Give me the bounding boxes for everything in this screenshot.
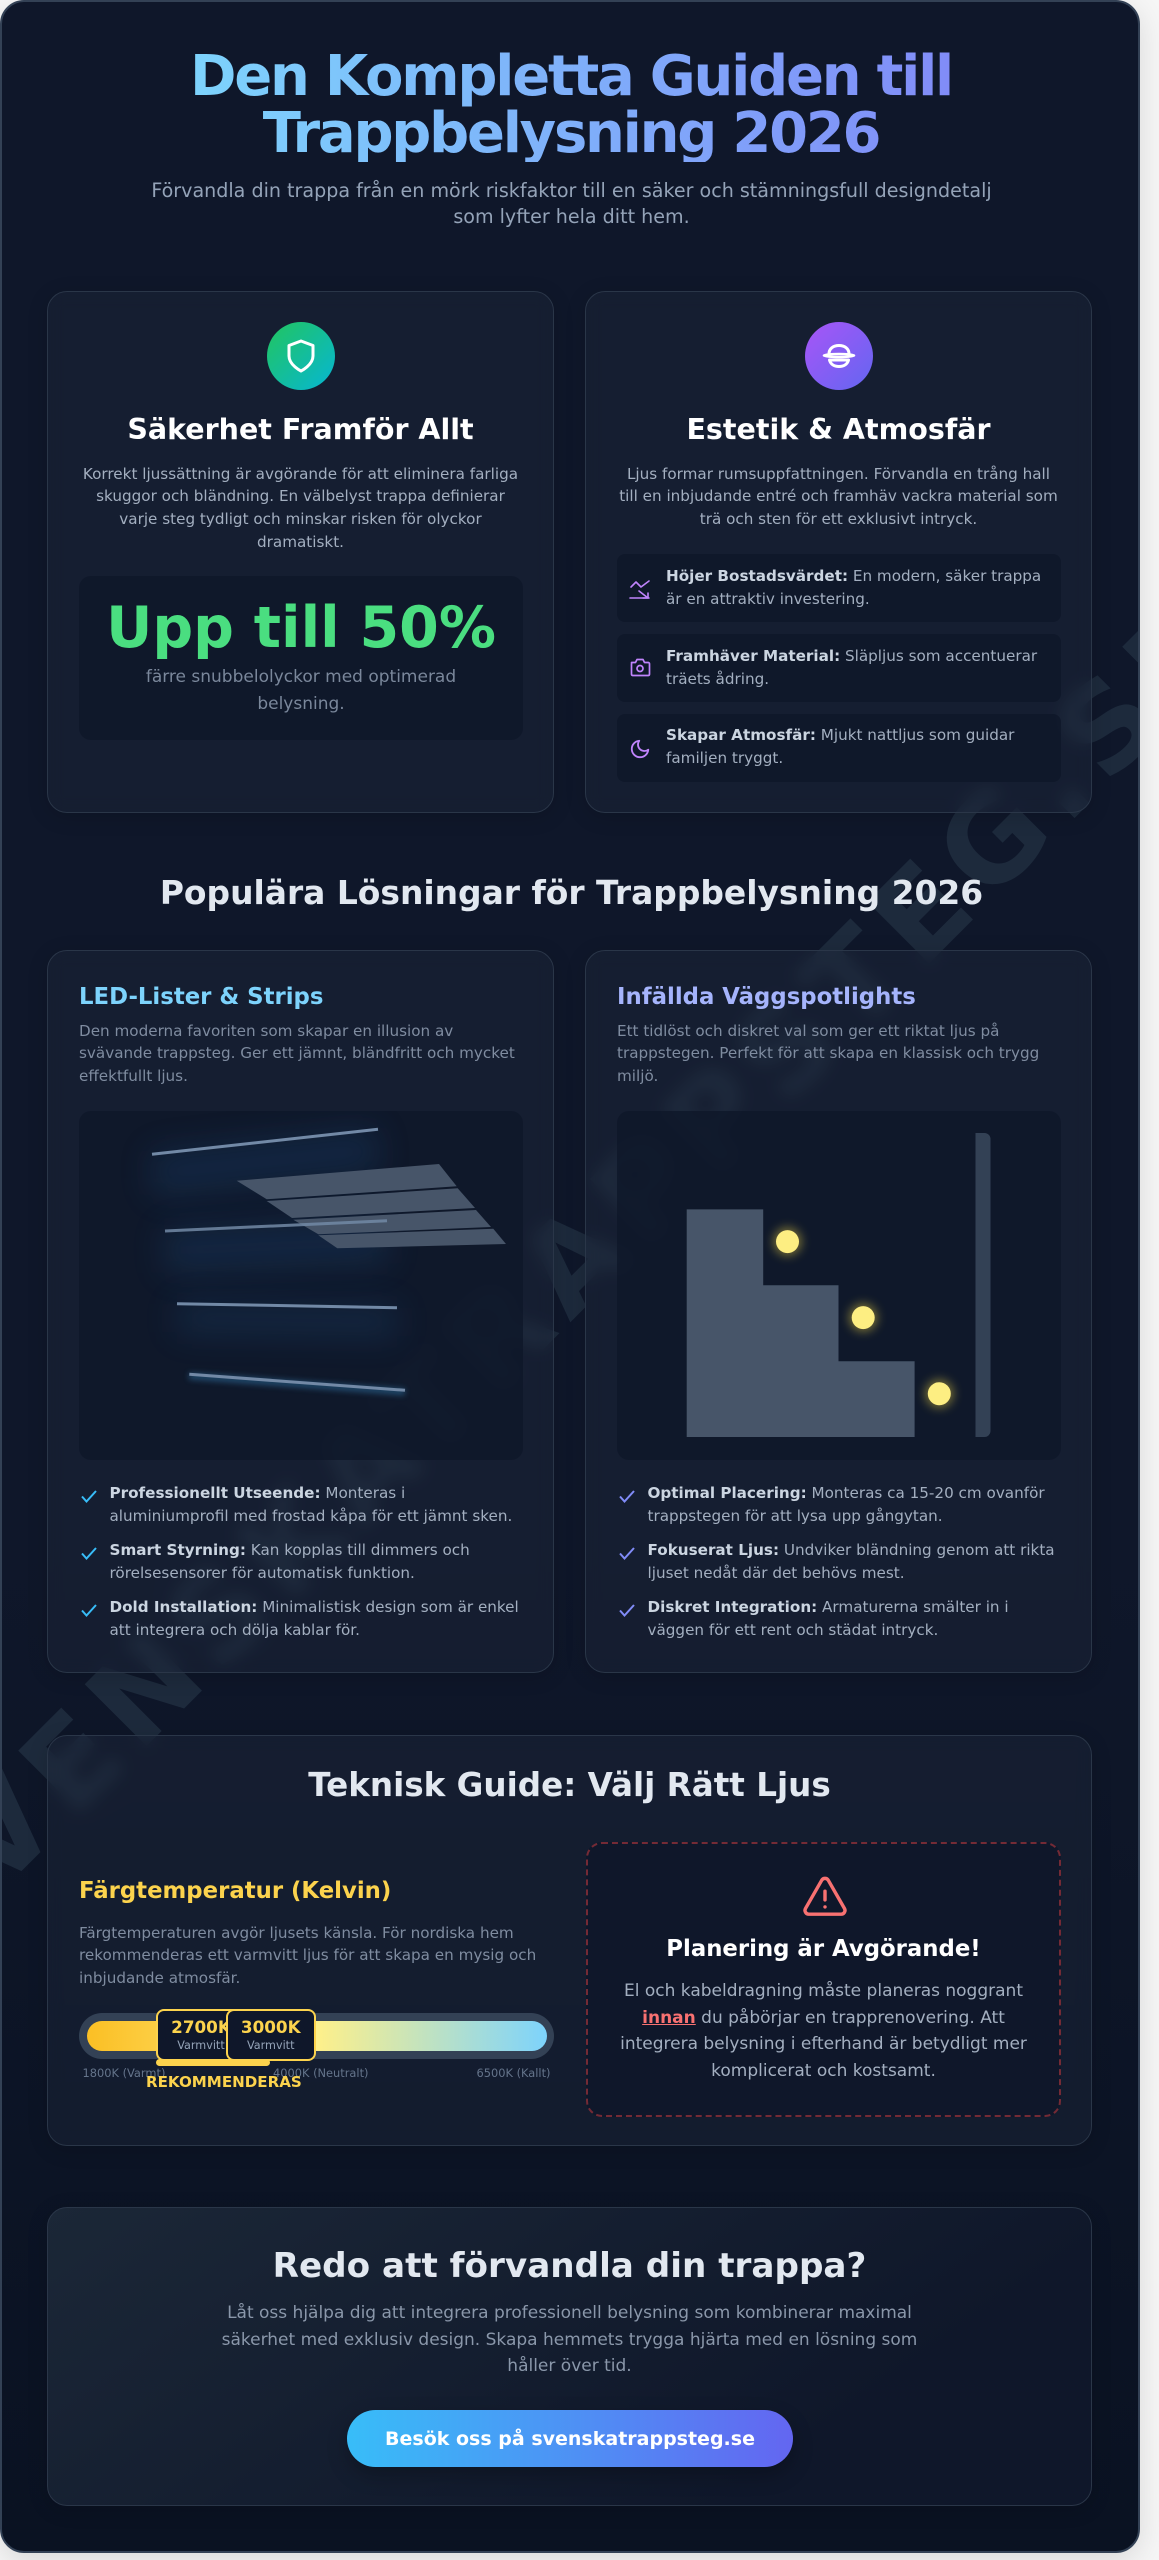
features: spots: ljuset nedåt där det behövs mest. xyxy=(648,1564,905,1582)
subtitle: som lyfter hela ditt hem. xyxy=(453,205,690,228)
feature 1 xyxy=(81,1484,512,1524)
panel: aesthetics xyxy=(585,291,1092,813)
rail xyxy=(976,1133,991,1437)
text: planning: komplicerat och kostsamt. xyxy=(711,2061,936,2081)
stat caption: belysning. xyxy=(257,694,345,714)
text: CTA xyxy=(222,2303,917,2376)
stairs xyxy=(237,1164,506,1248)
icon: moon xyxy=(630,740,650,758)
stat box xyxy=(79,576,523,740)
heading: technical: Teknisk Guide: Välj Rätt Ljus xyxy=(308,1766,831,1804)
text: safety xyxy=(83,464,518,551)
feature 3 xyxy=(619,1598,1009,1639)
heading: LED: LED-Lister & Strips xyxy=(79,984,323,1010)
text: kelvin: inbjudande atmosfär. xyxy=(79,1969,240,1987)
text: kelvin xyxy=(79,1924,536,1987)
text: kelvin: Färgtemperaturen avgör ljusets känsla. För nordiska hem xyxy=(79,1924,514,1942)
recommended label: REKOMMENDERAS xyxy=(146,2073,302,2091)
panel: wall spotlights xyxy=(585,950,1092,1673)
features: spots: väggen för ett rent och städat intryck. xyxy=(648,1621,938,1639)
color temperature scale xyxy=(79,2009,554,2091)
badge 2700K: 2700K xyxy=(171,2017,231,2037)
text: planning: El och kabeldragning måste planeras noggrant xyxy=(624,1981,1023,2001)
features: LED: Smart Styrning: Kan kopplas till dimmers och xyxy=(110,1541,470,1559)
text: träets ådring. xyxy=(666,670,769,688)
heading: spots: Infällda Väggspotlights xyxy=(617,984,916,1010)
heading: planning: Planering är Avgörande! xyxy=(666,1936,981,1962)
scale gradient xyxy=(86,2021,546,2051)
button: visit site: Besök oss på svenskatrappsteg.se xyxy=(385,2428,755,2450)
subtitle: Förvandla din trappa från en mörk riskfaktor till en säker och stämningsfull designdetalj xyxy=(151,178,992,202)
callout: planning xyxy=(586,1842,1061,2117)
text: aesthetics: Ljus formar rumsuppfattningen. Förvandla en trång hall xyxy=(627,464,1050,482)
section heading: solutions: Populära Lösningar för Trappbelysning 2026 xyxy=(160,873,983,912)
text: safety: varje steg tydligt och minskar risken för olyckor xyxy=(119,510,482,528)
feature 1 xyxy=(619,1484,1045,1524)
text: spots: trappstegen. Perfekt för att skapa en klassisk och trygg xyxy=(617,1044,1039,1062)
panel: LED strips xyxy=(47,950,554,1673)
text: kelvin: rekommenderas ett varmvitt ljus för att skapa en mysig och xyxy=(79,1946,536,1964)
text xyxy=(666,566,1041,608)
panel: technical guide xyxy=(47,1735,1092,2146)
spot 3 xyxy=(925,1380,953,1408)
text: safety: dramatiskt. xyxy=(257,533,344,551)
title: Den Kompletta Guiden till xyxy=(190,44,952,109)
text: planning xyxy=(620,1981,1027,2081)
text xyxy=(666,726,1014,767)
text: Skapar Atmosfär: Mjukt nattljus som guidar xyxy=(666,726,1014,744)
icon: camera xyxy=(630,658,650,676)
icon: warning xyxy=(803,1876,847,1916)
heading: kelvin: Färgtemperatur (Kelvin) xyxy=(79,1878,391,1904)
text: familjen tryggt. xyxy=(666,749,783,767)
features: spots xyxy=(619,1484,1055,1639)
text: spots: Ett tidlöst och diskret val som ger ett riktat ljus på xyxy=(617,1022,999,1040)
text: LED: effektfullt ljus. xyxy=(79,1067,188,1085)
text: safety: skuggor och bländning. En välbelyst trappa definierar xyxy=(96,487,505,505)
text: planning: integrera belysning i efterhand är betydligt mer xyxy=(620,2034,1027,2054)
text: aesthetics xyxy=(619,464,1058,528)
scale label 1800K: 1800K (Varmt) xyxy=(82,2066,165,2080)
icon: chart xyxy=(629,580,650,599)
text: LED: svävande trappsteg. Ger ett jämnt, bländfritt och mycket xyxy=(79,1044,515,1062)
icon: shield xyxy=(267,322,335,390)
badge 3000K: 3000K xyxy=(241,2017,301,2037)
text: LED xyxy=(79,1022,515,1085)
features: spots: Diskret Integration: Armaturerna smälter in i xyxy=(648,1598,1009,1616)
stairs xyxy=(687,1209,915,1437)
feature 2 xyxy=(619,1541,1055,1582)
text xyxy=(666,646,1038,688)
text: safety: Korrekt ljussättning är avgörande för att eliminera farliga xyxy=(83,464,518,482)
badge 2700K xyxy=(156,2009,246,2061)
illustration: LED stair xyxy=(79,1111,523,1460)
features: LED: Professionellt Utseende: Monteras i xyxy=(110,1484,405,1502)
text: Höjer Bostadsvärdet: En modern, säker trappa xyxy=(666,566,1041,584)
features: LED: Dold Installation: Minimalistisk design som är enkel xyxy=(110,1598,519,1616)
subtitle xyxy=(151,178,992,228)
stat number: Upp till 50% xyxy=(106,595,496,661)
text: LED: Den moderna favoriten som skapar en illusion av xyxy=(79,1022,453,1040)
title xyxy=(190,48,952,162)
benefit: value xyxy=(617,554,1061,622)
text: aesthetics: till en inbjudande entré och framhäv vackra material som xyxy=(619,487,1058,505)
spot 2 xyxy=(849,1304,877,1332)
heading: aesthetics: Estetik & Atmosfär xyxy=(686,412,991,446)
heading: safety: Säkerhet Framför Allt xyxy=(127,412,474,446)
badge 3000K xyxy=(226,2009,316,2061)
feature 3 xyxy=(81,1598,519,1639)
text: CTA: håller över tid. xyxy=(507,2356,632,2376)
text: spots xyxy=(617,1022,1039,1085)
badge 3000K: Varmvitt xyxy=(247,2039,294,2052)
feature 2 xyxy=(81,1541,470,1582)
text: aesthetics: trä och sten för ett exklusivt intryck. xyxy=(700,510,977,528)
text: är en attraktiv investering. xyxy=(666,590,870,608)
benefit: atmosphere xyxy=(617,714,1061,782)
text: CTA: Låt oss hjälpa dig att integrera professionell belysning som kombinerar maximal xyxy=(227,2303,912,2323)
panel: safety xyxy=(47,291,554,813)
features: spots: Optimal Placering: Monteras ca 15-20 cm ovanför xyxy=(648,1484,1045,1502)
button: visit site xyxy=(347,2410,793,2467)
illustration: spot stair xyxy=(617,1111,1061,1460)
scale label 6500K: 6500K (Kallt) xyxy=(476,2066,550,2080)
scale label 4000K: 4000K (Neutralt) xyxy=(273,2066,368,2080)
glow xyxy=(152,1149,405,1392)
heading: CTA: Redo att förvandla din trappa? xyxy=(273,2246,866,2286)
scale track xyxy=(79,2013,554,2059)
text: spots: miljö. xyxy=(617,1067,658,1085)
spot 1 xyxy=(774,1228,802,1256)
features: LED: att integrera och dölja kablar för. xyxy=(110,1621,360,1639)
features: LED: aluminiumprofil med frostad kåpa för ett jämnt sken. xyxy=(110,1506,512,1524)
stat caption: färre snubbelolyckor med optimerad xyxy=(146,667,456,687)
recommended bar xyxy=(156,2059,270,2066)
badge 2700K: Varmvitt xyxy=(177,2039,225,2052)
features: LED: rörelsesensorer för automatisk funktion. xyxy=(110,1564,415,1582)
LED strips xyxy=(152,1129,405,1390)
text: planning: innan du påbörjar en trapprenovering. Att xyxy=(642,2008,1005,2028)
title: Trappbelysning 2026 xyxy=(263,101,879,166)
panel: call to action xyxy=(47,2207,1092,2506)
text: CTA: säkerhet med exklusiv design. Skapa hemmets trygga hjärta med en lösning som xyxy=(222,2330,917,2350)
stat caption xyxy=(146,667,456,714)
features: spots: Fokuserat Ljus: Undviker bländning genom att rikta xyxy=(648,1541,1055,1559)
features: LED xyxy=(81,1484,519,1639)
benefit: material xyxy=(617,634,1061,702)
text: Framhäver Material: Släpljus som accentuerar xyxy=(666,646,1037,664)
features: spots: trappstegen för att lysa upp gångytan. xyxy=(648,1506,943,1524)
icon: lamp xyxy=(805,322,873,390)
